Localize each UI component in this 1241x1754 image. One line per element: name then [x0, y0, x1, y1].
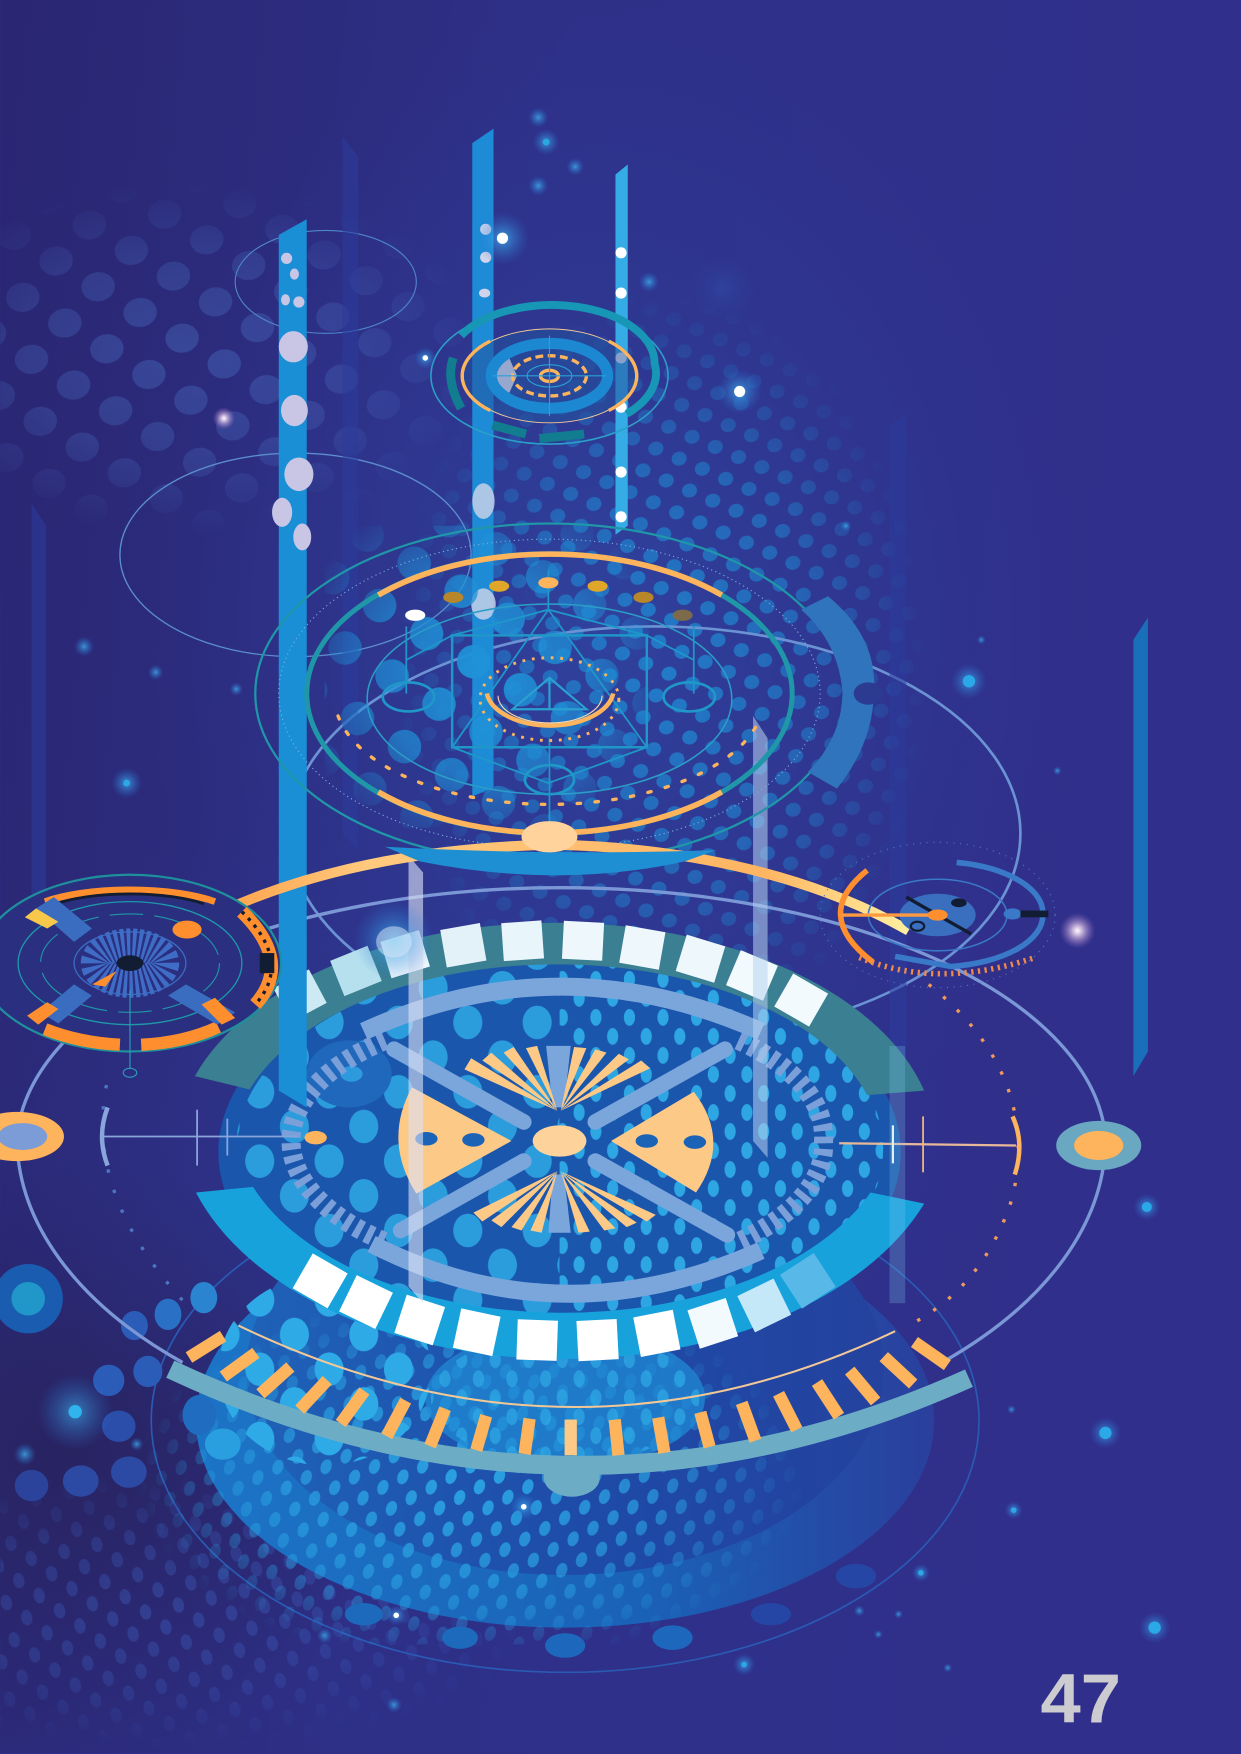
yellow wedges [398, 1087, 713, 1194]
right gauge [820, 842, 1055, 988]
central dots [236, 964, 884, 1312]
thin orange arc [238, 1326, 895, 1407]
faint dot field: lower left [0, 1494, 430, 1720]
teal band with white blocks [195, 920, 924, 1095]
large ellipse ornament [255, 524, 844, 864]
faint dot field: upper left [0, 212, 421, 502]
wedge holes [415, 1132, 706, 1149]
dim beams [32, 136, 906, 1063]
left side ring node [0, 1112, 64, 1161]
thin ellipse: top left [235, 230, 416, 333]
page number: 47 [1041, 1660, 1121, 1738]
orange ticks [186, 1331, 951, 1456]
blue under arc [385, 847, 716, 875]
orange dotted arc: right [909, 984, 1018, 1326]
left crosshair [102, 1107, 297, 1166]
dashed rings [291, 1040, 824, 1242]
large ellipse dots [325, 526, 649, 828]
top ornament [431, 305, 668, 444]
central X bars [394, 1049, 727, 1235]
thin large ellipse behind centre [289, 626, 1020, 1040]
top row of lamps [405, 577, 693, 621]
centre medallion [480, 658, 619, 741]
golden sweep arc [188, 845, 909, 931]
lower ring [151, 1166, 979, 1672]
bright blue band with white blocks [196, 1187, 924, 1361]
beam E [753, 716, 768, 1158]
left crosshair knob [304, 1131, 327, 1144]
thin ellipse: mid left [120, 453, 471, 657]
right crosshair [839, 1116, 1019, 1175]
dot field: upper centre and right [416, 324, 890, 968]
upper fan [464, 1046, 650, 1111]
beam C [615, 164, 628, 535]
large outer ring [17, 888, 1105, 1362]
right side ring node [1056, 1121, 1141, 1170]
lower dots [15, 1275, 876, 1658]
beam F [1133, 617, 1148, 1076]
beam D [409, 856, 423, 1303]
central disc [218, 953, 901, 1351]
notch [854, 682, 883, 705]
left gauge [0, 875, 281, 1077]
lower fan [473, 1171, 656, 1233]
beam B [471, 129, 496, 796]
golden arc end node [172, 921, 202, 939]
grey dotted arc: left [103, 1085, 190, 1309]
blue arc segment: right [801, 596, 874, 789]
geometric diagram [383, 570, 715, 861]
bottom teal band [170, 1369, 969, 1497]
peach dome [522, 821, 577, 852]
beam G [890, 1046, 905, 1303]
beam A [272, 219, 313, 1107]
light blue arcs [364, 987, 761, 1294]
